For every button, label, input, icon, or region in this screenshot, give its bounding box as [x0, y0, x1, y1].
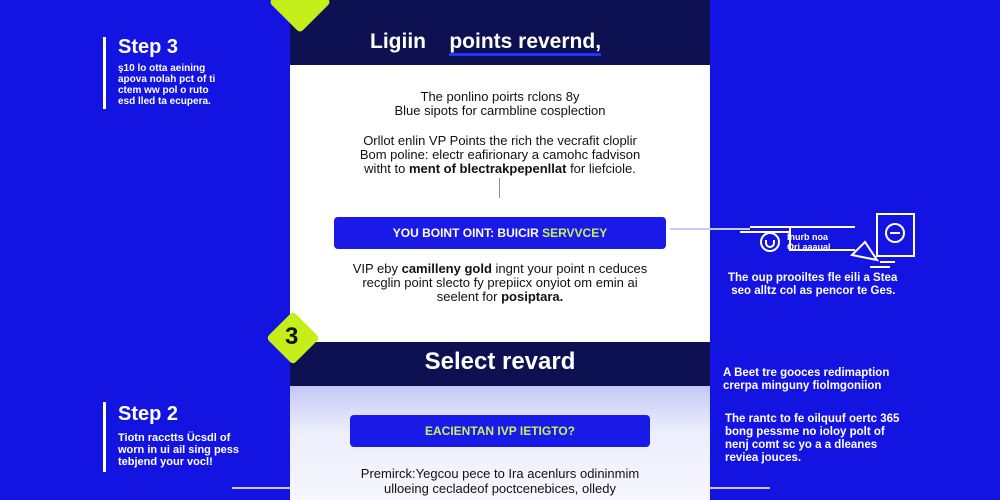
- button: service: YOU BOINT OINT: BUICIR SERVVCEY: [393, 226, 607, 240]
- text block: VIP gold: VIP eby camilleny gold ingnt your point n ceduces: [353, 261, 647, 276]
- text block: premium: [361, 466, 639, 496]
- text block: VIP gold: recglin point slecto fy prepiicx onyiot om emin ai: [362, 275, 638, 290]
- text: step 3 description: apova nolah pct of ti: [118, 74, 215, 85]
- right text: callout 3: reviea jouces.: [725, 452, 801, 464]
- text: step 3 description: ş10 lo otta aeining: [118, 63, 205, 74]
- badge: step 3: [268, 312, 318, 364]
- right text: callout 3: bong pessme no ioloy polt of: [725, 426, 885, 438]
- text block: VIP gold: seelent for posiptara.: [437, 289, 563, 304]
- text: step 2 description: [118, 431, 239, 468]
- right text: callout 2: A Beet tre gooces redimaption: [723, 367, 889, 379]
- title text: Ligiin points revernd,: [370, 30, 601, 53]
- right text: callout 3: The rantc to fe oilquuf oertc 365: [725, 413, 899, 425]
- right text: callout 2: crerpa minguny fiolmgoniion: [723, 380, 881, 392]
- text block: VIP gold: [352, 261, 647, 304]
- left step 2 text block: [103, 402, 283, 472]
- lavender body: [290, 386, 710, 500]
- button: service: [334, 217, 666, 249]
- text: step 3 description: ctem ww pol o ruto: [118, 85, 209, 96]
- icon label: Ori aaaual: [787, 242, 831, 252]
- title text: Select revard: [425, 348, 575, 375]
- text: step 2 description: Tiotn racctts Ücsdl of: [118, 432, 230, 444]
- text block: intro: Bom poline: electr eafirionary a camohc fadvison: [360, 147, 640, 162]
- text block: intro: witht to ment of blectrakpepenllat for liefciole.: [364, 161, 636, 176]
- heading: step 2: Step 2: [118, 403, 178, 425]
- right text: callout 2: [723, 367, 889, 392]
- text block: intro: The ponlino poirts rclons 8y: [420, 89, 579, 104]
- badge: step 3: 3: [285, 323, 298, 350]
- text: step 3 description: esd lled ta ecupera.: [118, 96, 211, 107]
- text block: intro: Orllot enlin VP Points the rich the vecrafit cloplir: [363, 133, 637, 148]
- text: step 3 description: [118, 63, 215, 107]
- text block: premium: Premirck:Yegcou pece to Ira acenlurs odininmim: [361, 466, 639, 481]
- header: select reward: [290, 342, 710, 386]
- right text: callout 1: [728, 272, 898, 297]
- right text: callout 3: [725, 413, 900, 464]
- left step 3 text block: [103, 37, 273, 109]
- text block: premium: ulloeing cecladeof poctcenebices, olledy: [384, 481, 616, 496]
- text: step 2 description: worn in ui ail sing pess: [118, 444, 239, 456]
- text block: intro: Blue sipots for carmbline cosplection: [394, 103, 606, 118]
- connector line right bottom: [710, 487, 770, 489]
- heading: step 3: Step 3: [118, 36, 178, 58]
- right text: callout 3: nenj comt sc yo a a dleanes: [725, 439, 877, 451]
- connector line left bottom: [232, 487, 290, 489]
- icon: device diagram: [740, 213, 915, 268]
- header: login points: [290, 0, 710, 65]
- connector line right top: [670, 228, 750, 230]
- icon label: [787, 232, 831, 252]
- divider tick: [499, 178, 500, 198]
- right text: callout 1: The oup prooiltes fle eili a Stea: [728, 272, 897, 284]
- button: VIP: [350, 415, 650, 447]
- text: step 2 description: tebjend your vocl!: [118, 456, 213, 468]
- right text: callout 1: seo alltz col as pencor te Ges.: [731, 285, 895, 297]
- text block: intro: [360, 89, 640, 176]
- central panel: [290, 0, 710, 500]
- icon label: Inurb noa: [787, 232, 828, 242]
- button: VIP: EACIENTAN IVP IETIGTO?: [425, 424, 575, 438]
- badge: step 1: [269, 0, 331, 33]
